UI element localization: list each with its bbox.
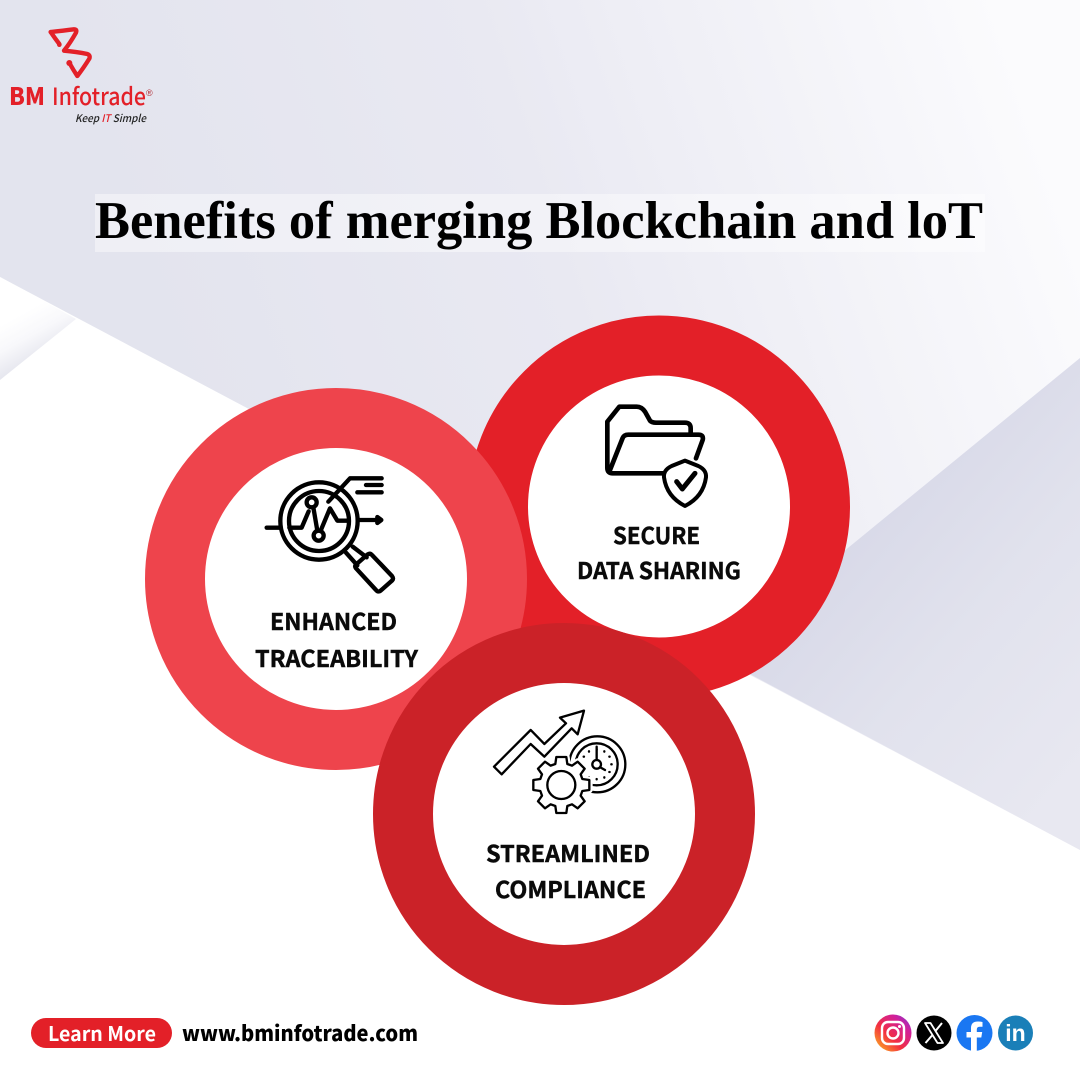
logo: BM Infotrade: ® [146, 88, 153, 98]
button: learn more: Learn More [48, 1018, 156, 1047]
logo wordmark: BM [9, 77, 45, 112]
logo: BM Infotrade [9, 29, 153, 126]
label: COMPLIANCE [495, 871, 646, 905]
social icons [874, 1014, 1033, 1052]
icon: growth arrow, gear and clock [494, 711, 625, 813]
panel: streamlined compliance [403, 653, 725, 975]
icon: magnifier with chart [267, 478, 393, 592]
ring [175, 418, 497, 740]
label: DATA SHARING [577, 552, 741, 586]
title: Benefits of merging Blockchain and loT [95, 192, 983, 250]
icon: linkedin [998, 1016, 1033, 1050]
label [577, 517, 741, 586]
logo: BM Infotrade: Infotrade [52, 77, 146, 112]
icon: linkedin: in [1005, 1020, 1026, 1046]
logo tagline: Keep IT Simple [75, 111, 147, 126]
panel: enhanced traceability [175, 418, 497, 740]
label [486, 835, 650, 905]
icon: x [916, 1016, 952, 1050]
icon: folder with shield [607, 407, 706, 506]
label [255, 603, 419, 674]
panel: secure data sharing [498, 346, 820, 668]
ring [403, 653, 725, 975]
icon: instagram [874, 1014, 912, 1052]
label: TRACEABILITY [255, 640, 419, 674]
label: ENHANCED [270, 603, 397, 637]
website url: www.bminfotrade.com [182, 1018, 418, 1048]
icon: facebook [956, 1015, 992, 1051]
label: STREAMLINED [486, 835, 650, 869]
logo mark [51, 29, 90, 76]
ring [498, 346, 820, 668]
label: SECURE [613, 517, 700, 551]
